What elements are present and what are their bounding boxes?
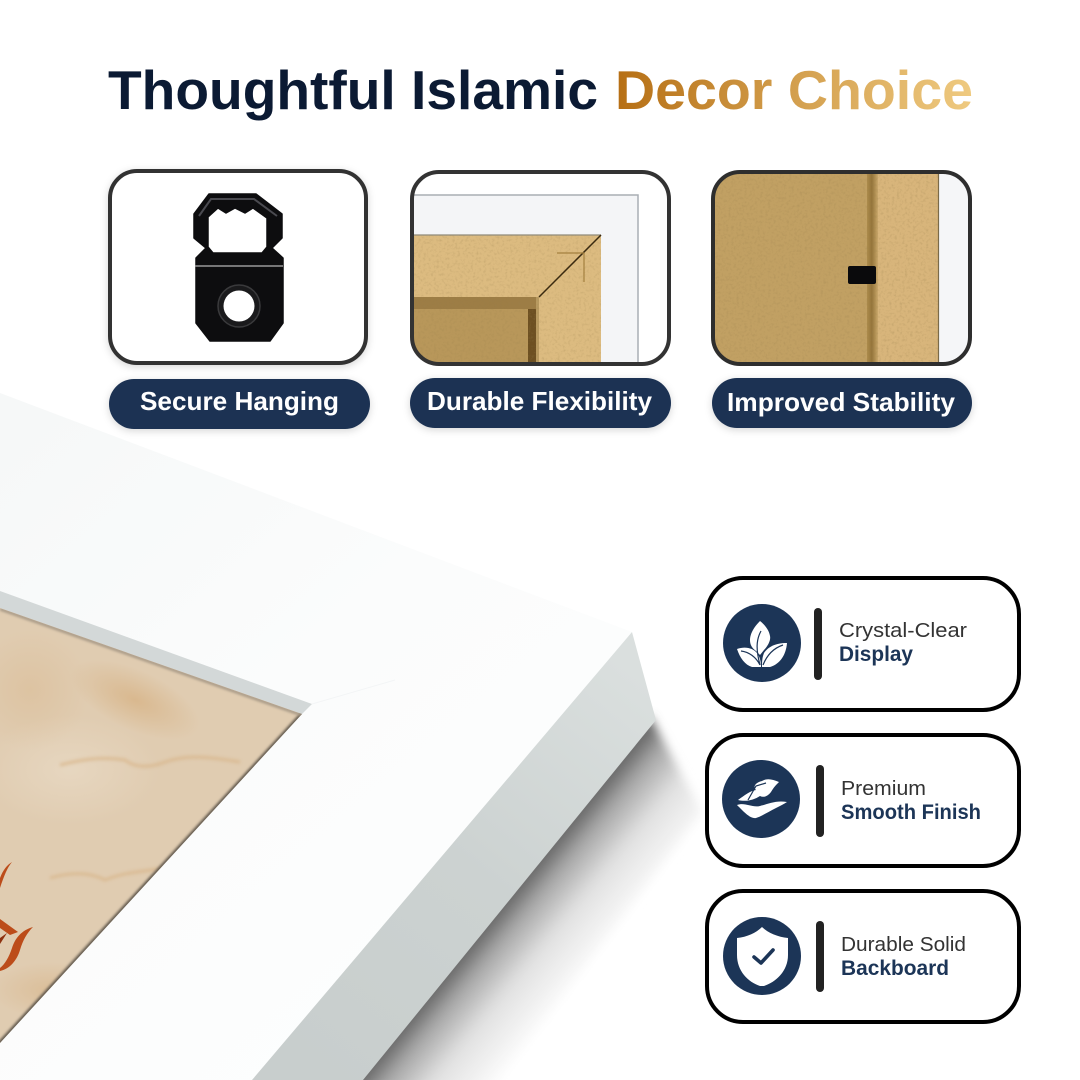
feature card: premium smooth finish — [707, 735, 1019, 866]
icon: sawtooth hanger — [194, 194, 283, 341]
divider bar — [816, 765, 824, 837]
icon: shield check — [723, 917, 801, 995]
card outline — [707, 891, 1019, 1022]
divider bar — [814, 608, 822, 680]
pill label — [109, 379, 370, 429]
frame front face — [0, 393, 632, 1080]
card outline — [707, 735, 1019, 866]
panel: improved stability — [711, 170, 972, 428]
parchment background — [0, 600, 310, 1050]
pill label: Improved Stability — [727, 387, 956, 417]
frame miter seam — [312, 680, 395, 704]
feature text: Backboard — [841, 957, 949, 980]
pill label: Durable Flexibility — [427, 386, 653, 416]
card with hanger photo — [110, 171, 366, 363]
backboard photo — [711, 170, 972, 366]
frame side face — [252, 632, 656, 1080]
calligraphy strokes — [0, 862, 33, 971]
card outline — [707, 578, 1019, 710]
title dark part: Thoughtful Islamic — [108, 59, 598, 121]
parchment stains — [2, 662, 240, 1006]
corner photo — [414, 194, 639, 362]
feature text: Durable Solid — [841, 934, 966, 956]
title — [108, 59, 973, 121]
grey inner bevel — [0, 591, 312, 714]
feature text — [841, 934, 966, 980]
feature text: Display — [839, 643, 913, 666]
photo: white frame corner — [0, 393, 702, 1080]
panel: secure hanging — [109, 171, 370, 429]
feature text: Smooth Finish — [841, 801, 981, 824]
feature text — [839, 620, 967, 666]
title gold part: Decor Choice — [615, 59, 973, 121]
panel: durable flexibility — [410, 170, 671, 428]
icon: leaves — [723, 604, 801, 682]
feature card: durable solid backboard — [707, 891, 1019, 1022]
icon: smooth fabric — [722, 760, 800, 838]
feature text: Premium — [841, 778, 926, 800]
artwork: parchment with calligraphy — [0, 600, 310, 1050]
pill label — [712, 378, 972, 428]
card border — [412, 172, 669, 364]
frame cast shadow — [340, 716, 702, 1080]
feature text — [841, 778, 981, 824]
pill label: Secure Hanging — [140, 386, 339, 416]
pill label — [410, 378, 671, 428]
feature text: Crystal-Clear — [839, 620, 967, 642]
card border — [713, 172, 970, 364]
divider bar — [816, 921, 824, 992]
feature card: crystal-clear display — [707, 578, 1019, 710]
artwork top edge shadow — [0, 609, 302, 715]
artwork inner edge shadow — [0, 713, 303, 1045]
